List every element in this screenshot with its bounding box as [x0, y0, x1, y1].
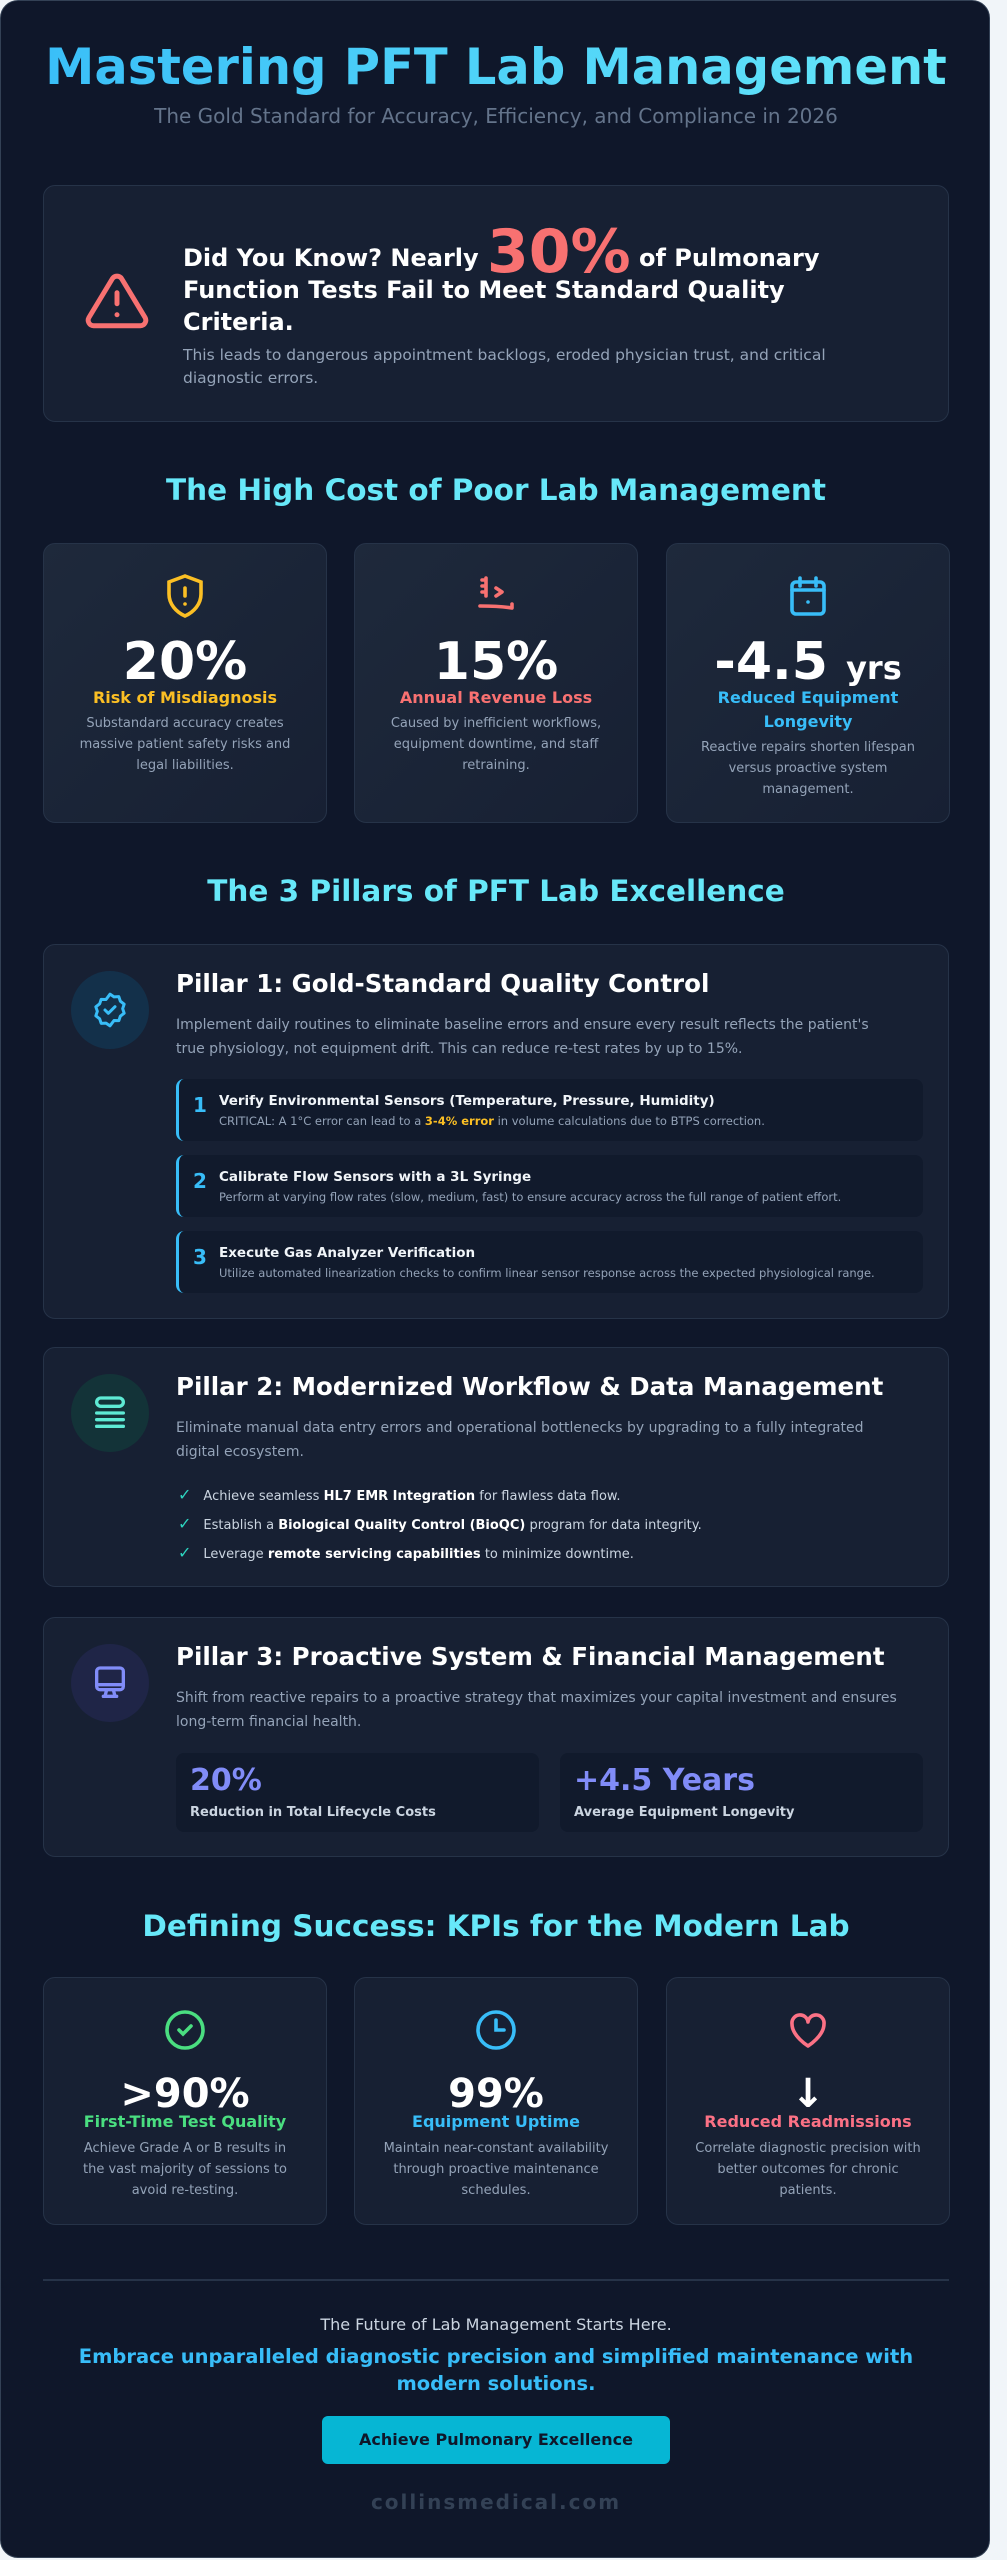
- button: [322, 2416, 670, 2464]
- stat label: Annual Revenue Loss: [400, 688, 592, 707]
- icon: check circle: [165, 2010, 205, 2050]
- icon: heart: [790, 2013, 826, 2048]
- KPI arrow: ↓: [791, 2071, 825, 2117]
- closing tagline: The Future of Lab Management Starts Here.: [320, 2315, 672, 2334]
- pillar description: Eliminate manual data entry errors and operational bottlenecks by upgrading to a fully integrated digital ecosystem.: [176, 1420, 864, 1460]
- panel: KPI first-time quality: [43, 1977, 327, 2225]
- step 3: [176, 1231, 923, 1293]
- KPI description: Correlate diagnostic precision with better outcomes for chronic patients.: [695, 2141, 921, 2198]
- pillar description: Implement daily routines to eliminate baseline errors and ensure every result reflects the patient's true physiology, not equipment drift. This can reduce re-test rates by up to 15%.: [176, 1017, 869, 1057]
- step 1: 1: [193, 1093, 207, 1117]
- stat label: Reduced Equipment Longevity: [718, 688, 898, 731]
- KPI description: Maintain near-constant availability through proactive maintenance schedules.: [384, 2141, 608, 2198]
- heading: pillars: The 3 Pillars of PFT Lab Excellence: [207, 874, 785, 908]
- pillar title: Pillar 2: Modernized Workflow & Data Management: [176, 1372, 883, 1401]
- icon: trend down: [478, 576, 514, 610]
- stat label: Risk of Misdiagnosis: [93, 688, 277, 707]
- stat description: Caused by inefficient workflows, equipment downtime, and staff retraining.: [391, 716, 601, 773]
- closing statement: Embrace unparalleled diagnostic precision and simplified maintenance with modern solutions.: [79, 2345, 913, 2395]
- stat number: 15%: [434, 632, 558, 692]
- stat description: Reactive repairs shorten lifespan versus proactive system management.: [701, 740, 915, 797]
- callout headline: Did You Know? Nearly 30% of Pulmonary Function Tests Fail to Meet Standard Quality Criteria.: [183, 217, 819, 336]
- callout: did you know: [43, 185, 949, 422]
- panel: KPI uptime: [354, 1977, 638, 2225]
- step 3: Execute Gas Analyzer Verification: [219, 1245, 475, 1261]
- checklist item 3: ✓ Leverage remote servicing capabilities to minimize downtime.: [178, 1543, 634, 1562]
- KPI label: Reduced Readmissions: [704, 2112, 912, 2131]
- step 1: CRITICAL: A 1°C error can lead to a 3-4% error in volume calculations due to BTPS correction.: [219, 1114, 765, 1128]
- KPI number: >90%: [120, 2071, 250, 2117]
- panel: equipment longevity: [666, 543, 950, 823]
- subtitle: The Gold Standard for Accuracy, Efficiency, and Compliance in 2026: [154, 104, 838, 128]
- icon: server: [71, 1374, 149, 1452]
- stat: longevity: +4.5 Years: [574, 1763, 755, 1798]
- icon: warning triangle: [86, 274, 148, 328]
- step 1: Verify Environmental Sensors (Temperature, Pressure, Humidity): [219, 1093, 715, 1109]
- icon: monitor: [71, 1644, 149, 1722]
- KPI number: 99%: [448, 2071, 544, 2117]
- step 2: 2: [193, 1169, 207, 1193]
- heading: high cost: The High Cost of Poor Lab Management: [166, 473, 826, 507]
- stat: longevity: [560, 1753, 923, 1832]
- panel: KPI readmissions: [666, 1977, 950, 2225]
- KPI label: Equipment Uptime: [412, 2112, 580, 2131]
- step 3: 3: [193, 1245, 207, 1269]
- pillar title: Pillar 1: Gold-Standard Quality Control: [176, 969, 709, 998]
- icon: clock: [476, 2010, 516, 2050]
- panel: revenue loss: [354, 543, 638, 823]
- icon: badge check: [71, 971, 149, 1049]
- icon: shield: [167, 574, 203, 618]
- checklist item 1: ✓ Achieve seamless HL7 EMR Integration for flawless data flow.: [178, 1485, 620, 1504]
- step 3: Utilize automated linearization checks to confirm linear sensor response across the expected physiological range.: [219, 1266, 875, 1280]
- icon: calendar: [790, 576, 826, 616]
- KPI description: Achieve Grade A or B results in the vast majority of sessions to avoid re-testing.: [83, 2141, 287, 2198]
- stat: lifecycle cost: 20%: [190, 1763, 262, 1798]
- stat: lifecycle cost: [176, 1753, 539, 1832]
- stat number: -4.5 yrs: [714, 632, 902, 692]
- title: Mastering PFT Lab Management: [45, 38, 947, 96]
- checklist item 2: ✓ Establish a Biological Quality Control (BioQC) program for data integrity.: [178, 1514, 702, 1533]
- KPI label: First-Time Test Quality: [84, 2112, 286, 2131]
- step 2: Calibrate Flow Sensors with a 3L Syringe: [219, 1169, 531, 1185]
- stat number: 20%: [123, 632, 247, 692]
- panel: pillar 2: [43, 1347, 949, 1587]
- stat description: Substandard accuracy creates massive patient safety risks and legal liabilities.: [80, 716, 290, 773]
- step 2: Perform at varying flow rates (slow, medium, fast) to ensure accuracy across the full range of patient effort.: [219, 1190, 841, 1204]
- step 2: [176, 1155, 923, 1217]
- callout text: This leads to dangerous appointment backlogs, eroded physician trust, and critical diagnostic errors.: [183, 346, 826, 387]
- button: Achieve Pulmonary Excellence: [359, 2430, 633, 2449]
- pillar description: Shift from reactive repairs to a proactive strategy that maximizes your capital investment and ensures long-term financial health.: [176, 1690, 897, 1730]
- stat: longevity: Average Equipment Longevity: [574, 1805, 794, 1820]
- stat: lifecycle cost: Reduction in Total Lifecycle Costs: [190, 1805, 436, 1820]
- panel: misdiagnosis: [43, 543, 327, 823]
- footer url: collinsmedical.com: [371, 2490, 621, 2514]
- panel: pillar 3: [43, 1617, 949, 1857]
- step 1: [176, 1079, 923, 1141]
- pillar title: Pillar 3: Proactive System & Financial Management: [176, 1642, 885, 1671]
- heading: KPIs: Defining Success: KPIs for the Modern Lab: [142, 1909, 850, 1943]
- panel: pillar 1: [43, 944, 949, 1319]
